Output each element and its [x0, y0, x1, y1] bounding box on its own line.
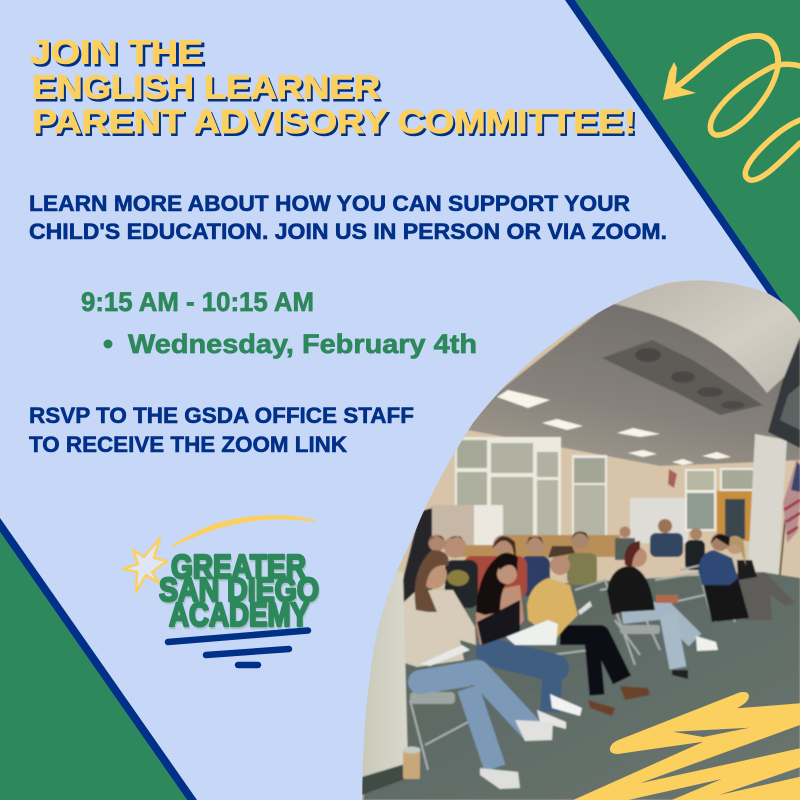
large window: [455, 437, 561, 540]
meeting time: 9:15 AM - 10:15 AM: [81, 287, 314, 317]
yellow scribble on the photo: [573, 692, 800, 800]
ceiling: [468, 304, 800, 466]
floor: [363, 572, 800, 800]
back row of attendees: [428, 519, 705, 608]
logo wordmark: SAN DIEGO: [160, 573, 320, 610]
room column: [748, 434, 787, 575]
title: ENGLISH LEARNER: [32, 68, 380, 106]
title: PARENT ADVISORY COMMITTEE!: [32, 103, 636, 140]
intro text: LEARN MORE ABOUT HOW YOU CAN SUPPORT YOUR: [29, 191, 630, 216]
television: [768, 337, 800, 448]
shelves: [460, 535, 620, 557]
intro text: [29, 191, 667, 244]
ceiling beam: [610, 278, 800, 393]
title: PARENT ADVISORY COMMITTEE!: [34, 106, 638, 142]
logo wordmark: GREATER: [171, 548, 306, 585]
logo wordmark: ACADEMY: [169, 596, 309, 633]
dark curtain: [398, 508, 432, 600]
logo wordmark: [159, 548, 320, 635]
icon: yellow looping arrow: [663, 36, 800, 180]
attendee in black top with red hair: [607, 541, 718, 679]
logo wordmark: ACADEMY: [170, 598, 310, 635]
title: [30, 34, 638, 142]
top right green corner: [565, 0, 800, 340]
coffee cup: [402, 746, 420, 779]
title: JOIN THE: [32, 36, 206, 73]
logo: Greater San Diego Academy: [123, 516, 320, 665]
attendee in black tank top: [476, 553, 582, 729]
rsvp text: TO RECEIVE THE ZOOM LINK: [29, 432, 348, 457]
logo wordmark: GREATER: [172, 550, 307, 587]
small flag on wall: [668, 469, 677, 488]
title: JOIN THE: [30, 34, 203, 70]
right windows and door: [685, 468, 757, 541]
wall display board: [431, 505, 503, 545]
right group of attendees: [698, 533, 795, 622]
whiteboard: [630, 498, 688, 543]
bottom left green corner: [0, 518, 197, 800]
rsvp text: RSVP TO THE GSDA OFFICE STAFF: [29, 403, 414, 428]
rsvp text: [29, 403, 414, 457]
logo underlines: [168, 630, 308, 665]
logo wordmark: SAN DIEGO: [159, 571, 319, 608]
foreground pillar: [360, 571, 408, 795]
dark ceiling panel: [602, 340, 763, 415]
attendee in yellow shirt: [527, 546, 650, 716]
intro text: CHILD'S EDUCATION. JOIN US IN PERSON OR VIA ZOOM.: [29, 219, 667, 244]
ceiling lights: [497, 390, 731, 465]
back wall: [430, 430, 800, 585]
photo: parent committee meeting in a classroom: [360, 275, 800, 800]
logo star and comet trail: [123, 516, 316, 592]
meeting date with bullet: Wednesday, February 4th: [128, 329, 477, 359]
title: ENGLISH LEARNER: [34, 71, 382, 108]
attendee in cream sweater: [403, 550, 553, 789]
chairs: [410, 562, 735, 770]
american flag: [779, 458, 800, 585]
small window: [572, 455, 607, 537]
